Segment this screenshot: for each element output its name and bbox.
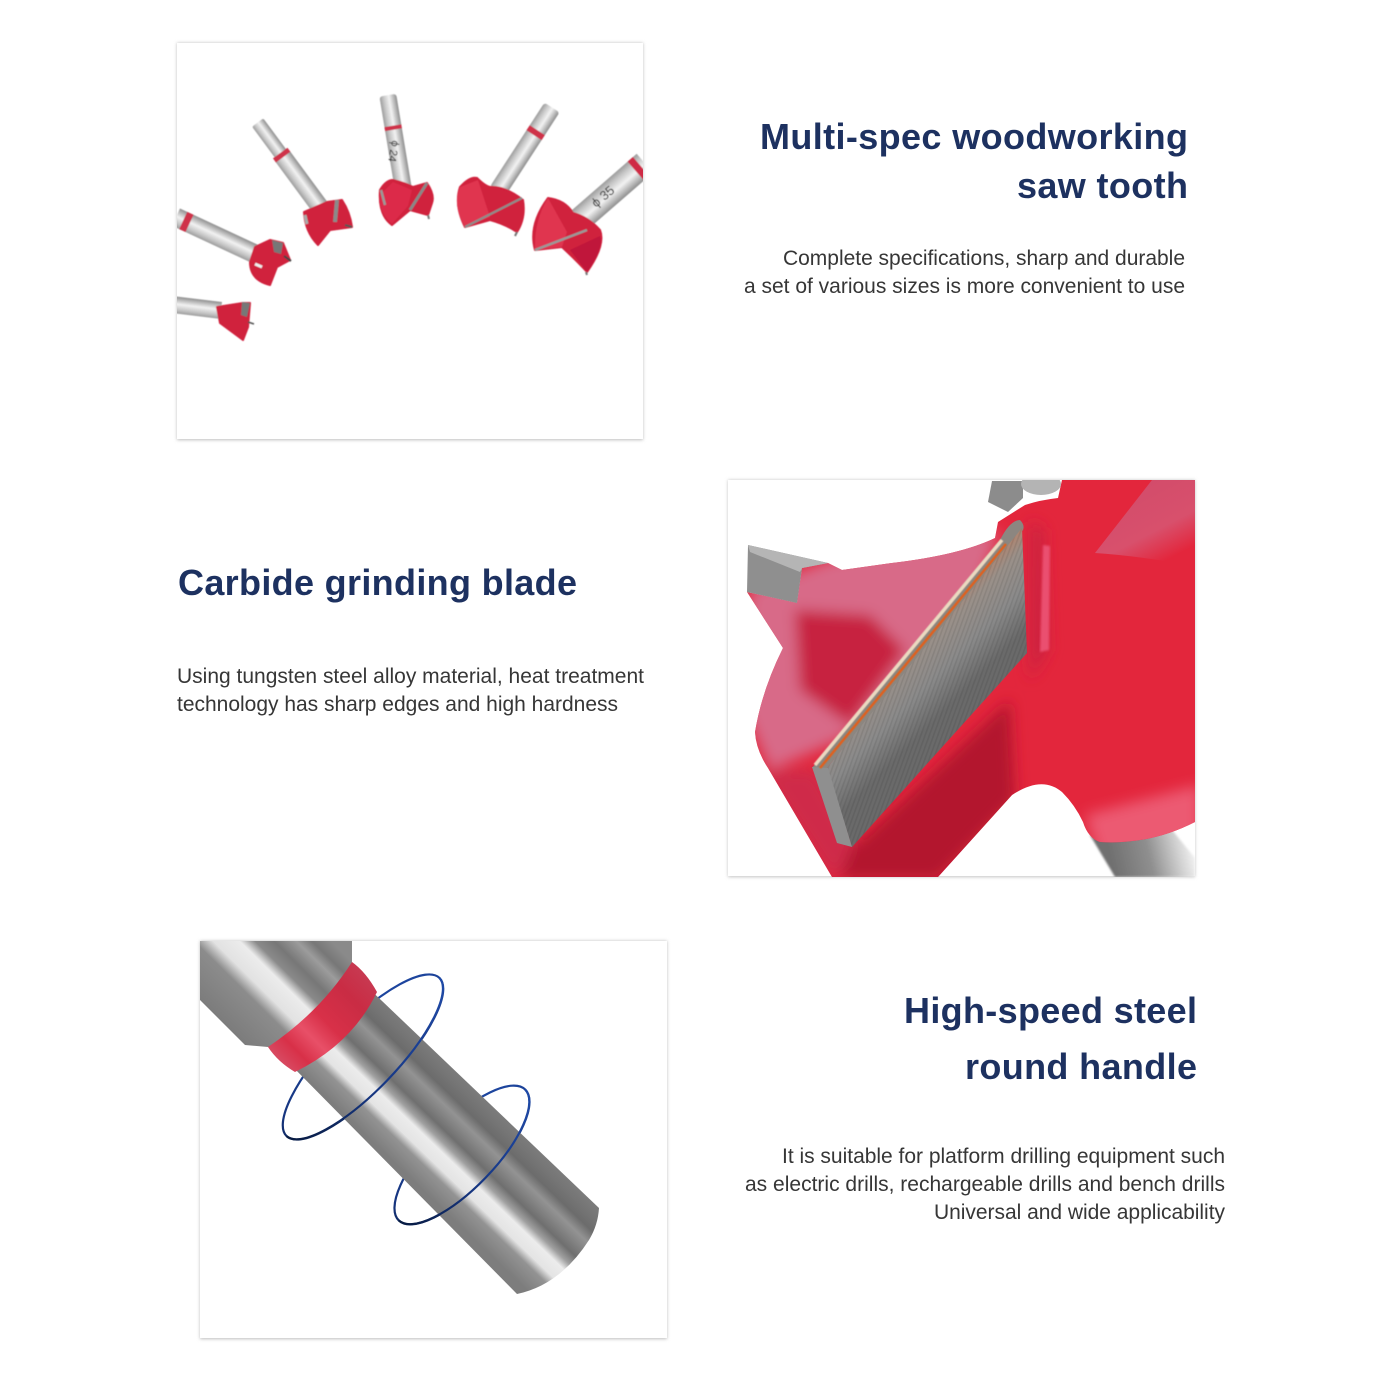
heading: carbide blade: Carbide grinding blade xyxy=(178,562,577,603)
drill bit: second from right xyxy=(457,103,560,236)
text: round handle description: as electric drills, rechargeable drills and bench drills xyxy=(745,1173,1225,1196)
text: multi-spec description: Complete specifications, sharp and durable xyxy=(783,247,1185,270)
tooth: top xyxy=(988,480,1061,512)
label: diameter 24: ϕ 24 xyxy=(385,139,401,163)
red band xyxy=(268,962,377,1072)
drill bit: lower left xyxy=(172,208,291,285)
drill bit: 35 mm xyxy=(533,154,653,275)
text: carbide description xyxy=(177,665,644,716)
panel: drill bit set photo xyxy=(172,43,653,440)
shank xyxy=(1089,832,1195,877)
heading: multi-spec: saw tooth xyxy=(1017,165,1188,206)
rotation rings: front arcs xyxy=(287,978,529,1224)
heading: round handle: High-speed steel xyxy=(904,990,1197,1031)
text: round handle description xyxy=(745,1145,1226,1224)
text: multi-spec description: a set of various sizes is more convenient to use xyxy=(744,275,1185,298)
heading: round handle xyxy=(904,990,1197,1087)
red cutter body xyxy=(728,480,1200,880)
drill bit: middle left xyxy=(252,118,352,245)
tooth: left xyxy=(747,545,828,603)
text: carbide description: Using tungsten steel alloy material, heat treatment xyxy=(177,665,644,688)
heading: round handle: round handle xyxy=(965,1046,1197,1087)
label: diameter 35: ϕ 35 xyxy=(588,183,617,210)
drill bit: 24 mm xyxy=(379,94,433,225)
text: carbide description: technology has sharp edges and high hardness xyxy=(177,693,618,716)
shaft xyxy=(288,980,599,1294)
panel: round handle close-up xyxy=(200,941,667,1339)
carbide blade xyxy=(812,520,1027,847)
drill bit: bottom left xyxy=(174,296,254,340)
text: round handle description: Universal and wide applicability xyxy=(934,1201,1226,1224)
heading: multi-spec: Multi-spec woodworking xyxy=(760,116,1188,157)
text: multi-spec description xyxy=(744,247,1185,298)
text: round handle description: It is suitable for platform drilling equipment such xyxy=(782,1145,1225,1168)
panel: carbide blade close-up xyxy=(728,473,1200,880)
facet: upper right xyxy=(1095,480,1195,566)
heading: multi-spec xyxy=(760,116,1188,206)
thick shank xyxy=(200,941,352,1050)
rotation ring: back halves xyxy=(282,973,531,1226)
